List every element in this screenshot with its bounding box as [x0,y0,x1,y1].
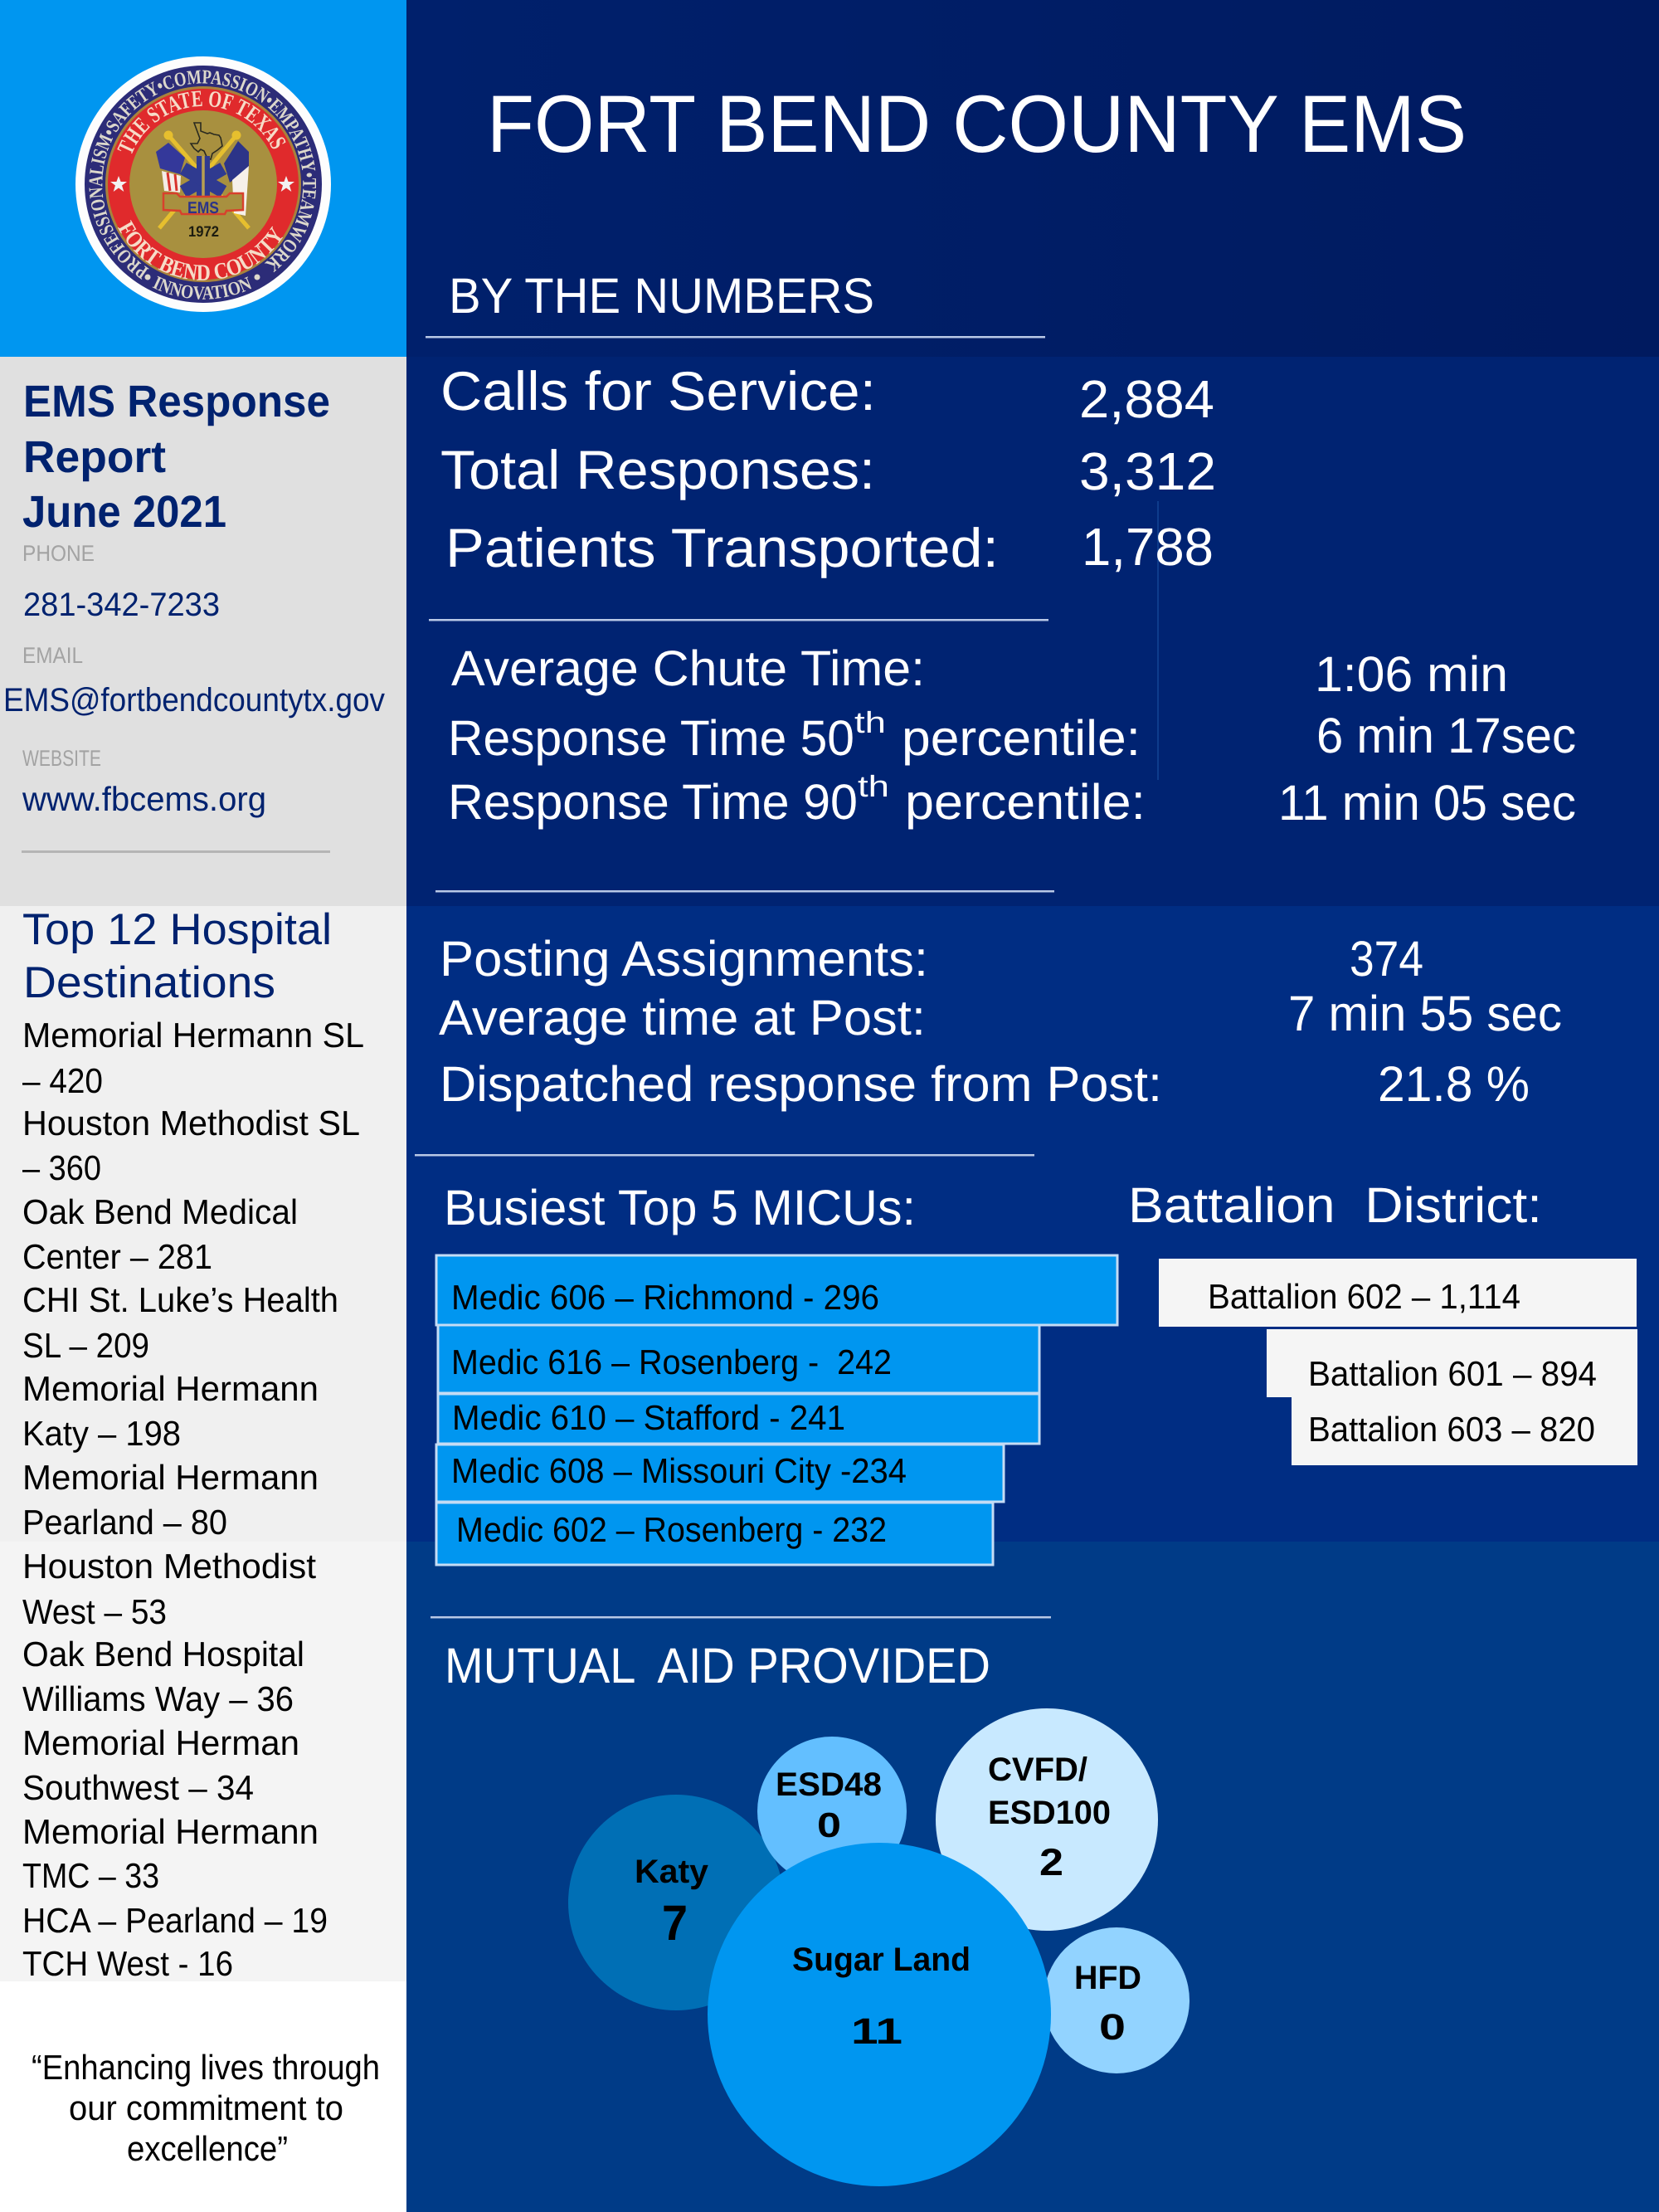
quote: “Enhancing lives through [32,2048,380,2087]
panel: top 12 hospital destinations [22,905,364,1983]
bubble: Sugar Land: Sugar Land [792,1942,971,1978]
heading: report title: June 2021 [22,487,226,537]
hospital list [22,1016,364,1983]
panel: call volume stats: Patients Transported: [445,517,999,578]
hospital list: Oak Bend Medical [22,1192,298,1231]
hospital list: Katy – 198 [22,1414,181,1453]
bar: battalion 603: Battalion 603 – 820 [1308,1410,1595,1449]
icon: Fort Bend County EMS seal: EMS [187,199,219,217]
bar: medic 616 [438,1325,1039,1393]
bar: battalion 603 [1292,1397,1637,1465]
hospital list: Memorial Hermann [22,1369,319,1408]
panel: posting stats: 7 min 55 sec [1288,986,1562,1041]
bar chart: busiest MICUs [436,1255,1117,1565]
panel: posting stats: 374 [1350,931,1423,987]
website [22,746,266,818]
bubble: ESD48: 0 [817,1805,841,1844]
panel: response times: 11 min 05 sec [1278,775,1576,831]
hospital list: Houston Methodist SL [22,1104,360,1143]
bar: medic 602 [436,1503,993,1565]
panel: response times: Response Time 90 [448,774,858,830]
bubble: CVFD/ESD100: 2 [1039,1840,1063,1883]
bubble: ESD48: ESD48 [776,1766,882,1803]
panel: call volume stats: 3,312 [1079,441,1216,501]
bar: medic 602: Medic 602 – Rosenberg - 232 [456,1510,887,1549]
bar: medic 610 [438,1394,1039,1444]
hospital list: Memorial Hermann SL [22,1016,364,1055]
bar: battalion 601 [1267,1329,1637,1397]
hospital list: Williams Way – 36 [22,1679,294,1718]
icon: Fort Bend County EMS seal: 1972 [188,223,219,240]
panel: contact sidebar [3,377,385,818]
phone: PHONE [22,541,95,566]
bubble: Katy: 7 [662,1895,688,1951]
heading: report title [22,377,330,537]
hospital list: Pearland – 80 [22,1503,227,1542]
hospital list: Houston Methodist [22,1547,316,1586]
hospital list: Southwest – 34 [22,1768,254,1807]
panel: response times: percentile: [905,774,1146,830]
bar: battalion 601: Battalion 601 – 894 [1308,1354,1597,1393]
panel: posting stats: Posting Assignments: [440,931,928,987]
hospital list: West – 53 [22,1592,167,1631]
heading: top 12 hospitals: Top 12 Hospital [22,905,332,954]
heading: by the numbers: BY THE NUMBERS [449,268,874,324]
email [3,643,385,719]
bubble: CVFD/ESD100 [936,1708,1158,1931]
panel: posting stats [439,931,1562,1112]
bar: medic 606 [436,1255,1117,1325]
email: EMAIL [22,643,83,668]
panel: response times: th [854,705,886,739]
bubble: HFD [1044,1927,1190,2073]
quote [32,2048,380,2168]
bubble: Katy: Katy [635,1854,709,1890]
panel: posting stats: 21.8 % [1378,1056,1530,1112]
phone: 281-342-7233 [23,587,220,623]
icon: Fort Bend County EMS seal: INNOVATION [153,275,251,300]
bubble: Katy [568,1795,784,2010]
email: EMS@fortbendcountytx.gov [3,682,385,719]
website: www.fbcems.org [22,780,266,818]
bubble: HFD: 0 [1099,2007,1126,2048]
hospital list: CHI St. Luke’s Health [22,1280,338,1319]
bar: medic 606: Medic 606 – Richmond - 296 [451,1278,879,1317]
heading: battalion district: Battalion District: [1128,1177,1542,1233]
bubble: ESD48 [757,1737,907,1886]
panel: response times [448,641,1576,831]
panel: call volume stats [440,360,1216,578]
bar: medic 608: Medic 608 – Missouri City -234 [451,1451,907,1490]
bar: battalion 602: Battalion 602 – 1,114 [1208,1277,1520,1316]
bubble: HFD: HFD [1074,1960,1141,1996]
bar: medic 616: Medic 616 – Rosenberg - 242 [451,1342,892,1381]
hospital list: Center – 281 [22,1237,212,1276]
panel: call volume stats: Total Responses: [440,439,875,500]
panel: posting stats: Average time at Post: [439,990,926,1045]
chart: battalion district [1159,1259,1637,1465]
bubble: CVFD/ESD100: CVFD/ [988,1752,1087,1788]
heading: busiest top 5 MICUs: Busiest Top 5 MICUs: [444,1180,916,1235]
panel: call volume stats: Calls for Service: [440,360,876,421]
hospital list: HCA – Pearland – 19 [22,1901,328,1940]
panel: call volume stats: 2,884 [1079,369,1214,429]
heading: top 12 hospitals: Destinations [23,958,275,1007]
bubble: CVFD/ESD100: ESD100 [988,1795,1111,1831]
website: WEBSITE [22,746,101,771]
panel: response times: 6 min 17sec [1316,708,1576,763]
bubble: Sugar Land [708,1843,1051,2186]
panel: posting stats: Dispatched response from Post: [440,1056,1162,1112]
bar: medic 608 [436,1445,1004,1502]
quote: our commitment to [69,2088,343,2127]
chart: mutual aid bubbles [568,1708,1190,2186]
hospital list: TMC – 33 [22,1856,159,1895]
icon: Fort Bend County EMS seal: PROFESSIONALISM•SAFETY•COMPASSION•EMPATHY•TEAMWORK [90,70,316,280]
title: FORT BEND COUNTY EMS [487,78,1467,169]
panel: response times: th [858,769,889,803]
icon: Fort Bend County EMS seal: THE STATE OF TEXAS [117,91,285,154]
hospital list: – 420 [22,1061,103,1100]
icon: Fort Bend County EMS seal: FORT BEND COUNTY [118,220,283,280]
hospital list: SL – 209 [22,1326,149,1365]
hospital list: – 360 [22,1148,101,1187]
heading: report title: EMS Response [23,377,330,426]
hospital list: Memorial Hermann [22,1812,319,1851]
panel: call volume stats: 1,788 [1082,517,1214,577]
heading: mutual aid provided: MUTUAL AID PROVIDED [445,1638,990,1693]
hospital list: TCH West - 16 [22,1944,233,1983]
hospital list: Memorial Hermann [22,1458,319,1497]
bar: medic 610: Medic 610 – Stafford - 241 [452,1398,845,1437]
panel: response times: Average Chute Time: [451,641,925,696]
quote: excellence” [127,2129,288,2168]
panel: response times: percentile: [902,710,1141,766]
panel: response times: 1:06 min [1315,646,1508,702]
bar: battalion 602 [1159,1259,1637,1327]
heading: top 12 hospitals [22,905,332,1007]
heading: report title: Report [23,432,166,482]
hospital list: Oak Bend Hospital [22,1635,304,1674]
bubble: Sugar Land: 11 [851,2011,902,2052]
hospital list: Memorial Herman [22,1723,299,1762]
panel: response times: Response Time 50 [448,710,854,766]
phone [22,541,220,623]
